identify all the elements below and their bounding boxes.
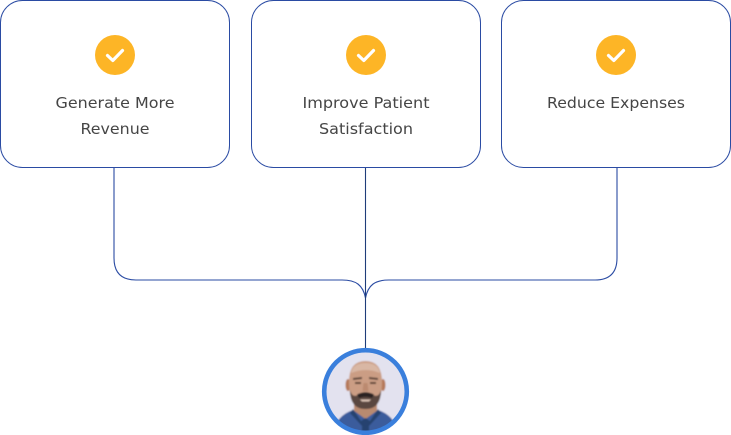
neck	[353, 404, 378, 420]
head	[348, 360, 383, 397]
ears	[346, 379, 350, 391]
panel: improve patient satisfaction	[252, 0, 480, 168]
text: generate more revenue	[56, 94, 174, 138]
panel: reduce expenses	[502, 0, 730, 168]
icon: check badge	[346, 35, 386, 75]
eyes and brows	[353, 377, 378, 380]
text: generate more revenue: Revenue	[80, 120, 150, 138]
text: improve patient satisfaction: Satisfaction	[319, 120, 413, 138]
text: improve patient satisfaction	[302, 94, 430, 138]
text: reduce expenses: Reduce Expenses	[547, 94, 685, 112]
icon: check badge	[596, 35, 636, 75]
shirt	[338, 410, 393, 430]
text: improve patient satisfaction: Improve Patient	[302, 94, 430, 112]
connector lines	[114, 167, 617, 350]
panel: generate more revenue	[0, 0, 230, 168]
beard	[350, 390, 381, 409]
icon: check badge	[95, 35, 135, 75]
avatar: portrait of a man	[320, 345, 412, 435]
avatar ring	[324, 350, 407, 433]
text: generate more revenue: Generate More	[56, 94, 174, 112]
